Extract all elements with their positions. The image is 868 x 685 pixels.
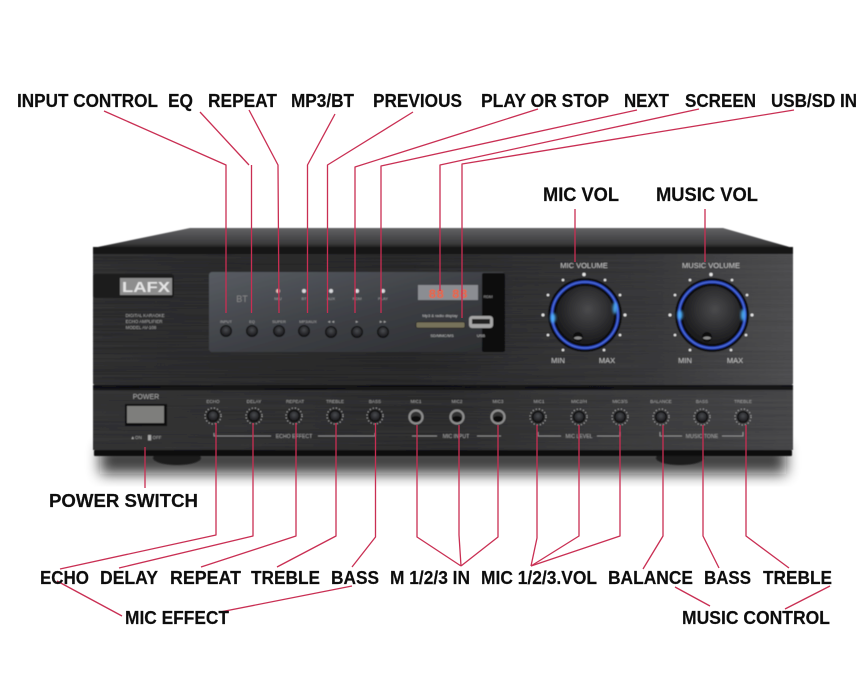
scale dots [542,273,626,351]
section brackets: MUSIC TONE [686,434,719,440]
lower knob labels: MIC2 [452,399,463,404]
LED labels: M/U [274,296,282,301]
knob tick rings [205,408,751,425]
rotary controls [208,410,748,422]
LED labels [274,296,388,301]
lower knob labels: MIC3/S [612,399,628,404]
lower knob labels: REPEAT [286,399,304,404]
upper front panel [93,248,793,385]
bottom labels: DELAY [100,568,158,588]
lower knob labels: MIC1 [411,399,422,404]
leader lines: top row [104,109,794,318]
section brackets: MIC INPUT [443,434,470,440]
power switch: ▲ON █ OFF [131,434,162,441]
button labels: SUPER [272,319,286,324]
lower knob labels: MIC1 [534,399,545,404]
power switch [125,394,167,441]
mic volume knob: MIN [551,356,565,365]
rubber feet [153,451,704,465]
lower knob labels: ECHO [206,399,220,404]
bottom labels [40,568,832,588]
volume labels: MUSIC VOL [656,184,758,206]
lower knob labels: MIC3 [493,399,504,404]
bottom labels: ECHO [40,568,89,588]
bottom labels: M 1/2/3 IN [390,568,470,588]
bottom labels: BASS [704,568,751,588]
control window: USB [477,333,485,338]
button labels: EQ [249,319,255,324]
LED labels: BT [301,296,307,301]
button labels: MP3/AUX [299,319,317,324]
model text: ECHO AMPLIFIER [126,319,162,324]
chassis shadow [100,446,786,474]
volume labels [543,184,758,206]
top labels: EQ [168,91,193,111]
top labels: INPUT CONTROL [17,91,158,111]
top labels: NEXT [624,91,669,111]
top labels: SCREEN [685,91,756,111]
mic volume knob: MAX [599,356,615,365]
dark top lip [93,247,793,254]
mic volume knob: MIC VOLUME [560,261,608,270]
lower knob labels: BASS [369,399,381,404]
lower knob labels: DELAY [247,399,261,404]
lower knob labels: MIC2/H [571,399,587,404]
control window [209,272,505,352]
leader lines: bottom row [57,423,830,616]
music volume knob: MAX [727,356,743,365]
LED display: 88 88 [428,287,468,302]
lower knob labels: TREBLE [734,399,752,404]
LED labels: RDM [352,296,362,301]
indicator LEDs [276,289,385,293]
mic input jacks [410,410,504,424]
section brackets: MIC LEVEL [565,434,593,440]
music volume knob: MIN [678,356,692,365]
button labels: ► [355,319,359,324]
button labels [220,319,387,324]
mic volume knob [542,261,626,365]
volume labels: MIC VOL [543,184,619,206]
control window: Mp3 & radio display [422,313,458,318]
lower knob labels: BALANCE [650,399,672,404]
bottom labels: BALANCE [608,568,693,588]
model text [125,313,165,330]
divider between panels [93,385,793,390]
bottom lip [94,450,792,456]
model text: DIGITAL KARAOKE [125,313,165,318]
USB port [469,316,493,328]
LED labels: PLAY [378,296,388,301]
button labels: ◄◄ [327,319,335,324]
lower knob labels: TREBLE [326,399,344,404]
control window: BT [236,294,248,304]
top labels [17,91,857,111]
top labels: USB/SD IN [771,91,857,111]
bottom labels: TREBLE [251,568,320,588]
top labels: PREVIOUS [373,91,462,111]
LED labels: AUX [327,296,335,301]
group labels: MIC EFFECT [125,608,229,628]
power switch: POWER [133,394,159,401]
bottom labels: TREBLE [763,568,832,588]
LED display [418,285,478,302]
button labels: ►► [379,319,387,324]
SD slot [416,322,465,328]
control window: SD/MMC/MS [430,333,454,338]
section brackets: ECHO EFFECT [276,434,313,440]
button labels: INPUT [220,319,233,324]
model text: MODEL AV-108 [126,325,157,330]
brand logo: LAFX [122,279,170,296]
music volume knob [668,261,754,365]
lower knob labels: BASS [696,399,708,404]
brand logo [93,274,174,298]
bottom labels: MIC 1/2/3.VOL [481,568,597,588]
group labels: MUSIC CONTROL [682,608,830,628]
bottom labels: BASS [331,568,379,588]
top labels: MP3/BT [291,91,354,111]
transport buttons [220,326,388,338]
control window: RDM [483,294,493,299]
top cover [93,228,793,248]
lower knob labels [206,399,752,404]
music volume knob: MUSIC VOLUME [682,261,740,270]
top labels: REPEAT [208,91,277,111]
top labels: PLAY OR STOP [481,91,609,111]
section brackets [214,432,743,440]
group labels [125,608,830,628]
brushed metal texture [93,254,793,450]
bottom labels: REPEAT [170,568,241,588]
amplifier chassis [93,228,793,474]
scale dots [668,273,754,351]
power switch label: POWER SWITCH [49,491,198,511]
lower front panel [93,390,793,450]
